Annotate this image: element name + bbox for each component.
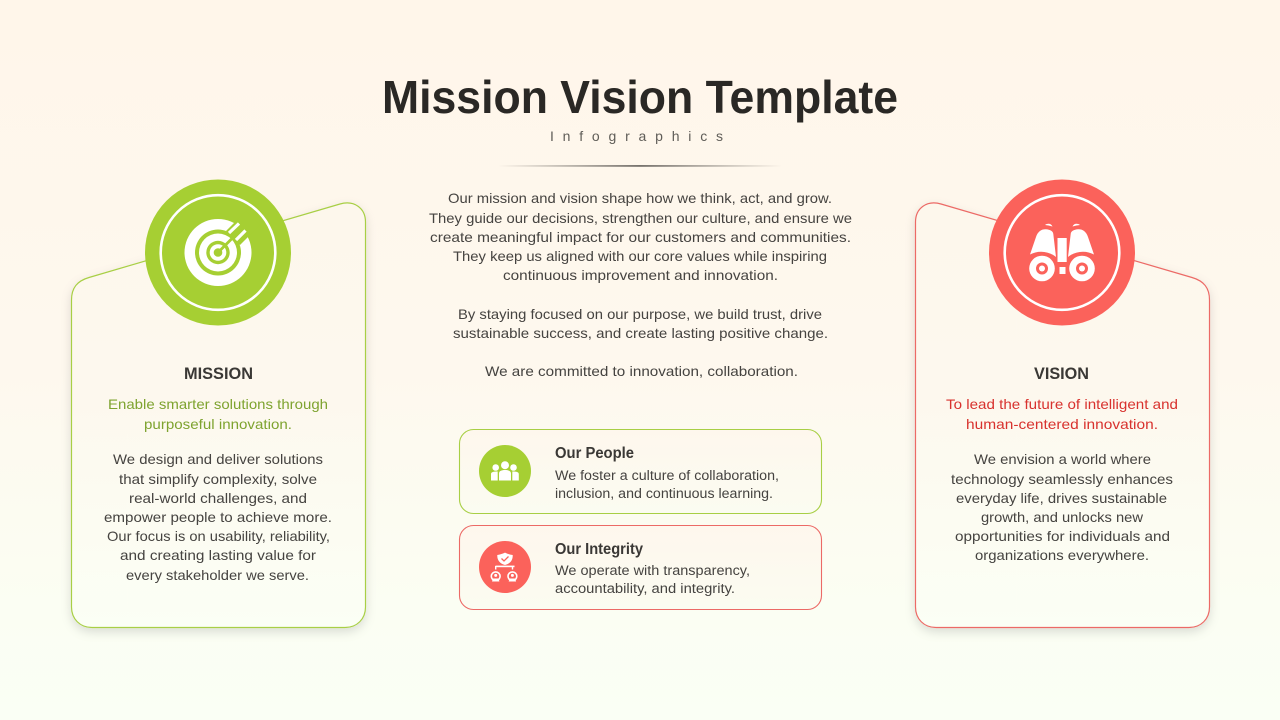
mission heading: MISSION <box>184 364 253 383</box>
our people text: We foster a culture of collaboration, <box>555 468 779 483</box>
vision card shape <box>916 203 1210 627</box>
vision description: We envision a world where <box>974 451 1151 467</box>
intro text block <box>429 190 852 379</box>
intro text block: They keep us aligned with our core values while inspiring <box>453 248 827 264</box>
mission description: Our focus is on usability, reliability, <box>107 528 330 544</box>
vision description: opportunities for individuals and <box>955 528 1170 544</box>
panel: mission <box>72 180 366 628</box>
vision description <box>951 451 1173 563</box>
intro text block: By staying focused on our purpose, we build trust, drive <box>458 306 822 322</box>
mission description: We design and deliver solutions <box>113 451 323 467</box>
mission description: every stakeholder we serve. <box>126 567 309 583</box>
vision description: organizations everywhere. <box>975 547 1149 563</box>
icon: integrity <box>479 541 531 593</box>
vision statement <box>946 396 1178 432</box>
our people text: inclusion, and continuous learning. <box>555 486 773 501</box>
mission description: and creating lasting value for <box>120 547 316 563</box>
our people text <box>555 468 779 501</box>
mission statement: purposeful innovation. <box>144 416 292 432</box>
icon: people <box>479 445 531 497</box>
vision heading: VISION <box>1034 364 1089 383</box>
mission description: empower people to achieve more. <box>104 509 332 525</box>
icon: binoculars <box>989 180 1135 326</box>
title: Mission Vision Template <box>382 71 898 123</box>
mission statement <box>108 396 328 432</box>
mission statement: Enable smarter solutions through <box>108 396 328 412</box>
mission description <box>104 451 332 583</box>
vision statement: human-centered innovation. <box>966 416 1158 432</box>
intro text block: sustainable success, and create lasting positive change. <box>453 325 828 341</box>
vision description: everyday life, drives sustainable <box>956 490 1167 506</box>
intro text block: create meaningful impact for our customers and communities. <box>430 229 851 245</box>
mission description: that simplify complexity, solve <box>119 471 317 487</box>
subtitle: Infographics <box>550 128 723 144</box>
intro text block: Our mission and vision shape how we think, act, and grow. <box>448 190 832 206</box>
panel: our people <box>460 430 822 514</box>
our integrity text: accountability, and integrity. <box>555 581 735 596</box>
panel: our integrity <box>460 526 822 610</box>
our integrity text <box>555 563 750 596</box>
panel: vision <box>916 180 1210 628</box>
our integrity heading: Our Integrity <box>555 541 643 558</box>
vision description: growth, and unlocks new <box>981 509 1144 525</box>
our integrity text: We operate with transparency, <box>555 563 750 578</box>
mission description: real-world challenges, and <box>129 490 307 506</box>
intro text block: We are committed to innovation, collaboration. <box>485 363 798 379</box>
icon: target <box>145 180 291 326</box>
vision description: technology seamlessly enhances <box>951 471 1173 487</box>
vision statement: To lead the future of intelligent and <box>946 396 1178 412</box>
mission card shape <box>72 203 366 627</box>
intro text block: continuous improvement and innovation. <box>503 267 778 283</box>
our people heading: Our People <box>555 445 634 462</box>
intro text block: They guide our decisions, strengthen our culture, and ensure we <box>429 210 852 226</box>
